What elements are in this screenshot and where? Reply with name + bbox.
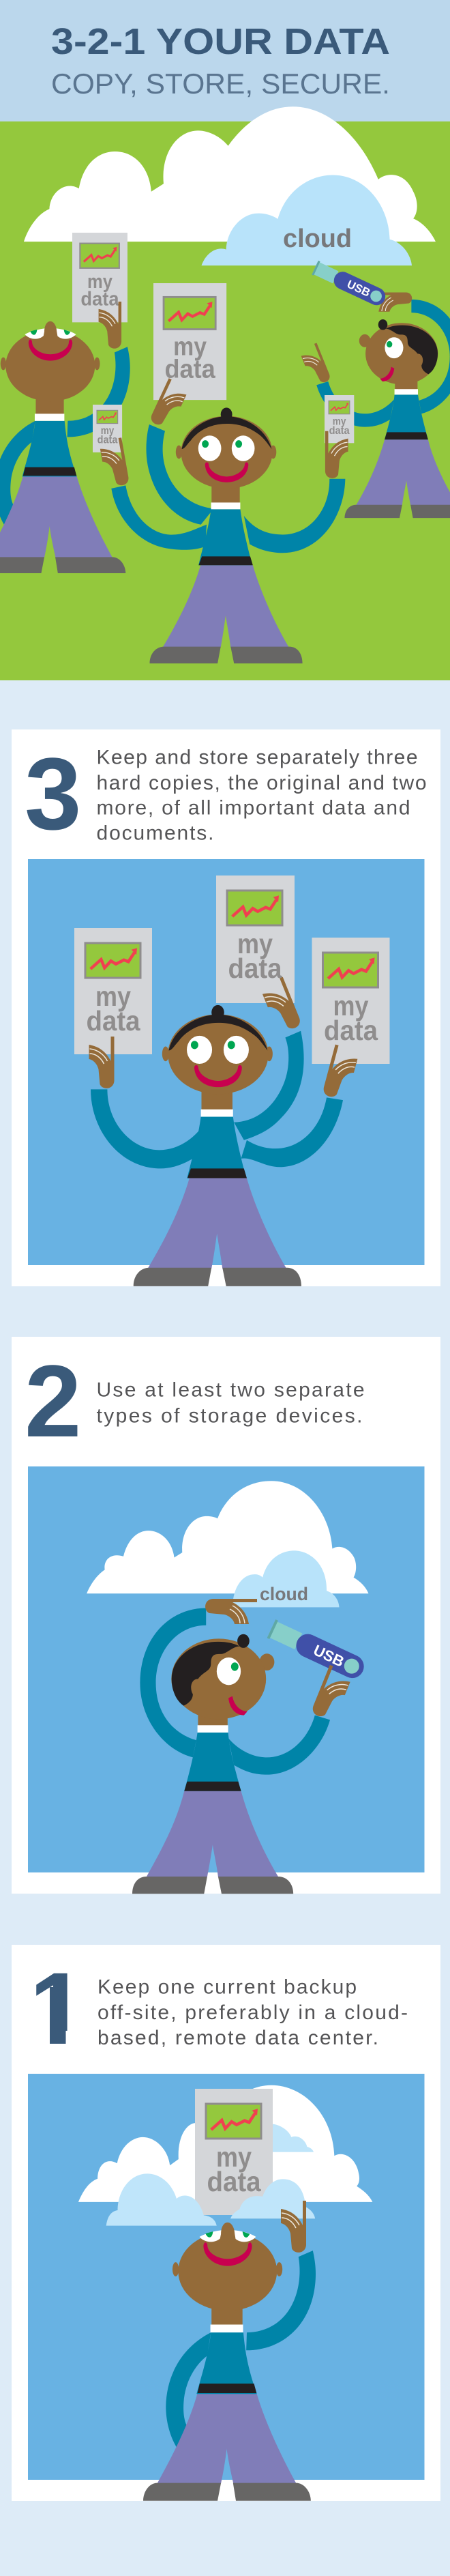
step 3 person <box>134 1005 301 1286</box>
step 3 illustration background <box>28 859 424 1265</box>
step 1 person looking up <box>143 2201 316 2501</box>
step 2 white cloud <box>87 1481 368 1593</box>
step 2 USB drive <box>267 1618 368 1682</box>
hero person left looking up <box>0 302 130 573</box>
title: 3-2-1 YOUR DATA <box>51 21 390 62</box>
step 1 card <box>12 1945 440 2501</box>
step 3 text: Keep and store separately three <box>97 746 417 768</box>
step 2 card <box>12 1337 440 1894</box>
hero cloud label: cloud <box>283 225 352 253</box>
step 2 text <box>97 1379 364 1427</box>
hero small document left: my <box>101 425 115 437</box>
step 3 text: hard copies, the original and two <box>97 772 427 794</box>
step 1 text: off-site, preferably in a cloud- <box>97 2001 408 2024</box>
step 1 text: based, remote data center. <box>97 2027 378 2049</box>
hero document top left <box>72 233 127 322</box>
hero center hand holding small left document <box>99 437 130 488</box>
hero USB drive <box>312 260 388 308</box>
step 1 white cloud <box>78 2085 372 2202</box>
step 2 numeral: 2 <box>25 1344 81 1458</box>
step 1 numeral: 1 <box>29 1951 86 2066</box>
step 3 hand upper right <box>259 977 302 1034</box>
panel: step 2 <box>12 1337 440 1894</box>
step 3 document middle <box>216 875 295 1003</box>
hero center hand holding large document <box>149 378 190 431</box>
hero large document: my <box>173 332 207 361</box>
subtitle: COPY, STORE, SECURE. <box>51 68 390 100</box>
step 1 document: my <box>216 2141 252 2173</box>
step 2 text: Use at least two separate <box>97 1379 364 1402</box>
step 3 card <box>12 729 440 1286</box>
step 3 arms <box>91 1031 343 1168</box>
step 1 text: Keep one current backup <box>97 1976 357 1999</box>
hero document top left: my <box>87 271 113 293</box>
step 1 small light cloud <box>258 2124 314 2152</box>
hero scene <box>0 106 450 663</box>
step 2 illustration background <box>28 1466 424 1872</box>
hero person right in profile <box>299 292 450 518</box>
step 3 text: documents. <box>97 822 214 845</box>
hero center person arms <box>111 424 345 553</box>
hero small document right: my <box>333 416 346 427</box>
panel: step 3 <box>12 729 440 1286</box>
step 3 numeral: 3 <box>25 736 81 851</box>
hero center person <box>150 407 303 663</box>
step 3 hand left <box>89 1037 115 1088</box>
step 2 light cloud <box>232 1550 340 1607</box>
hero light blue cloud <box>201 175 412 265</box>
step 3 text: more, of all important data and <box>97 797 410 820</box>
hero USB drive: USB <box>345 278 372 300</box>
hero large white cloud <box>24 106 436 242</box>
step 3 hand lower right <box>322 1045 359 1101</box>
step 3 document middle: data <box>228 953 283 984</box>
panel: step 1 <box>12 1945 440 2501</box>
header band <box>0 0 450 121</box>
step 2 USB drive: USB <box>311 1641 347 1670</box>
green hero background <box>0 121 450 680</box>
step 1 document: data <box>207 2166 262 2197</box>
step 1 document <box>195 2089 273 2215</box>
step 3 document middle: my <box>237 928 273 959</box>
step 3 document left: my <box>95 981 131 1012</box>
step 3 document right <box>312 938 390 1064</box>
hero large document <box>153 283 226 400</box>
step 1 illustration background <box>28 2074 424 2480</box>
step 1 numeral <box>36 1973 68 2044</box>
step 3 document left <box>74 928 152 1054</box>
step 3 document right: data <box>324 1015 378 1046</box>
step 2 person in profile <box>132 1599 353 1894</box>
hero document top left: data <box>80 288 119 310</box>
hero small document left: data <box>97 435 118 446</box>
hero small document right: data <box>329 425 350 437</box>
step 1 text <box>97 1976 408 2049</box>
step 3 text <box>97 746 427 845</box>
hero center hand holding small right document <box>325 431 348 478</box>
step 2 text: types of storage devices. <box>97 1404 363 1427</box>
step 2 cloud label: cloud <box>260 1584 308 1604</box>
hero small document left <box>93 405 122 452</box>
hero large document: data <box>164 355 215 384</box>
step 3 document left: data <box>86 1005 141 1037</box>
step 3 document right: my <box>333 990 369 1022</box>
hero small document right <box>325 395 354 443</box>
step 1 light clouds <box>106 2173 315 2226</box>
